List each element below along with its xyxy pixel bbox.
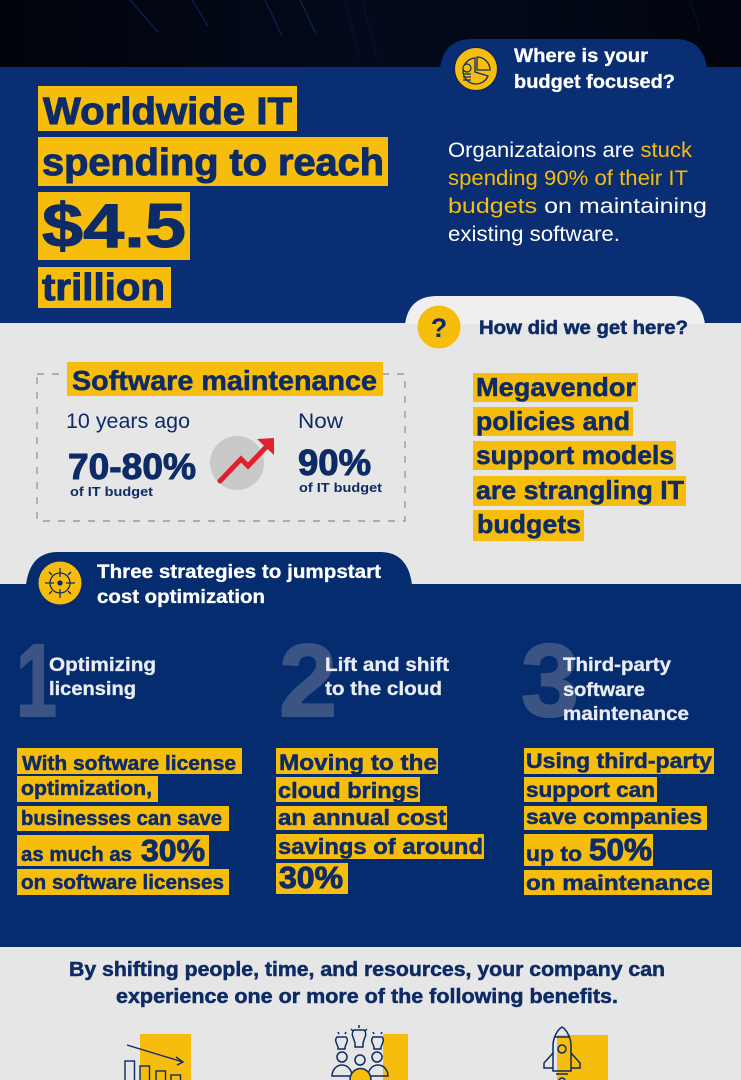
strategy 2: lift and shift <box>276 623 484 895</box>
heading: software maintenance: Software maintenance <box>72 365 377 396</box>
panel: three strategies section <box>0 552 741 947</box>
highlighted text 1: optimization, <box>21 777 152 800</box>
text block: budget statement: existing software. <box>448 223 620 246</box>
number 3: 3 <box>521 623 579 738</box>
highlighted text 2: an annual cost <box>278 805 447 830</box>
highlighted text 2: cloud brings <box>278 778 419 803</box>
heading 3: maintenance <box>563 704 689 725</box>
title: spending to reach <box>42 142 384 184</box>
top dark photo band <box>0 0 741 68</box>
title: $4.5 <box>42 192 186 261</box>
text block: budget statement <box>448 139 707 246</box>
tab heading: where is your budget focused <box>514 46 675 93</box>
panel: benefits section <box>0 947 741 1080</box>
heading 3: Third-party <box>563 655 671 676</box>
tab heading: how did we get here: How did we get here? <box>479 318 688 339</box>
tab heading: three strategies: Three strategies to jumpstart <box>97 562 382 583</box>
stat: now: 90% <box>298 442 371 483</box>
heading 2: to the cloud <box>325 679 442 700</box>
strategy 3: third-party maintenance <box>521 623 714 895</box>
highlighted text 3: Using third-party <box>526 750 712 773</box>
number 1: 1 <box>16 623 57 738</box>
highlighted text 2 <box>276 748 484 895</box>
heading: benefits intro: experience one or more of the following benefits. <box>116 986 618 1008</box>
icon: target crosshair <box>38 562 82 604</box>
heading 2: Lift and shift <box>325 655 450 676</box>
text block: budget statement: budgets on maintaining <box>448 195 707 218</box>
highlighted text 3: up to <box>526 843 582 866</box>
title: trillion <box>42 267 165 309</box>
icon: pie chart and coins <box>454 48 498 90</box>
heading 3: software <box>563 680 645 701</box>
highlighted text 2: savings of around <box>278 834 483 859</box>
icon: team with light bulbs <box>332 1025 408 1080</box>
highlighted text 2: Moving to the <box>279 750 437 775</box>
heading 3 <box>563 655 689 725</box>
tab heading: three strategies: cost optimization <box>97 587 265 608</box>
panel: how did we get here section <box>0 296 741 585</box>
text block: budget statement: spending 90% of their IT <box>448 167 688 190</box>
title <box>38 86 388 309</box>
callout: megavendor policies: are strangling IT <box>476 475 684 505</box>
callout: megavendor policies: policies and <box>476 406 630 436</box>
icon: rocket <box>544 1027 608 1080</box>
highlighted text 3: 50% <box>589 832 652 867</box>
highlighted text 2: 30% <box>279 860 343 895</box>
text block: budget statement: Organizataions are stuck <box>448 139 693 162</box>
stat: now: of IT budget <box>299 480 383 495</box>
heading 1 <box>49 655 156 700</box>
highlighted text 1 <box>17 748 242 895</box>
heading: benefits intro: By shifting people, time, and resources, your company can <box>69 959 665 981</box>
stat: now <box>298 410 383 495</box>
highlighted text 1: With software license <box>22 752 236 775</box>
highlighted text 3: on maintenance <box>526 872 710 895</box>
number 2: 2 <box>279 623 337 738</box>
stat: 10 years ago: 10 years ago <box>66 410 190 433</box>
heading 1: Optimizing <box>49 655 156 676</box>
stat: now: Now <box>298 410 344 433</box>
icon: question mark: ? <box>431 313 447 343</box>
highlighted text 1: as much as <box>21 843 132 866</box>
icon: question mark <box>418 306 460 348</box>
heading: benefits intro <box>69 959 665 1008</box>
highlighted text 3 <box>524 748 714 895</box>
heading 2 <box>325 655 450 700</box>
icon: declining bar chart <box>125 1034 191 1080</box>
stat: 10 years ago: of IT budget <box>70 484 154 499</box>
panel: software maintenance comparison <box>37 362 405 521</box>
highlighted text 3: support can <box>526 779 655 802</box>
heading 1: licensing <box>49 679 136 700</box>
stat: 10 years ago <box>66 410 196 499</box>
callout: megavendor policies: budgets <box>477 509 581 539</box>
tab heading: where is your budget focused: budget focused? <box>514 72 675 93</box>
stat: 10 years ago: 70-80% <box>68 446 196 487</box>
strategy 1: optimizing licensing <box>16 623 242 895</box>
title: Worldwide IT <box>43 91 292 133</box>
highlighted text 1: 30% <box>141 833 205 868</box>
tab heading: three strategies <box>97 562 382 608</box>
callout: megavendor policies <box>473 372 686 541</box>
icon: rising red arrow <box>210 436 274 490</box>
callout: megavendor policies: support models <box>476 440 674 470</box>
highlighted text 1: businesses can save <box>21 807 222 830</box>
highlighted text 3: save companies <box>526 806 702 829</box>
highlighted text 1: on software licenses <box>21 871 224 894</box>
tab heading: where is your budget focused: Where is your <box>514 46 649 67</box>
callout: megavendor policies: Megavendor <box>476 372 636 402</box>
panel: budget header section <box>0 39 741 324</box>
